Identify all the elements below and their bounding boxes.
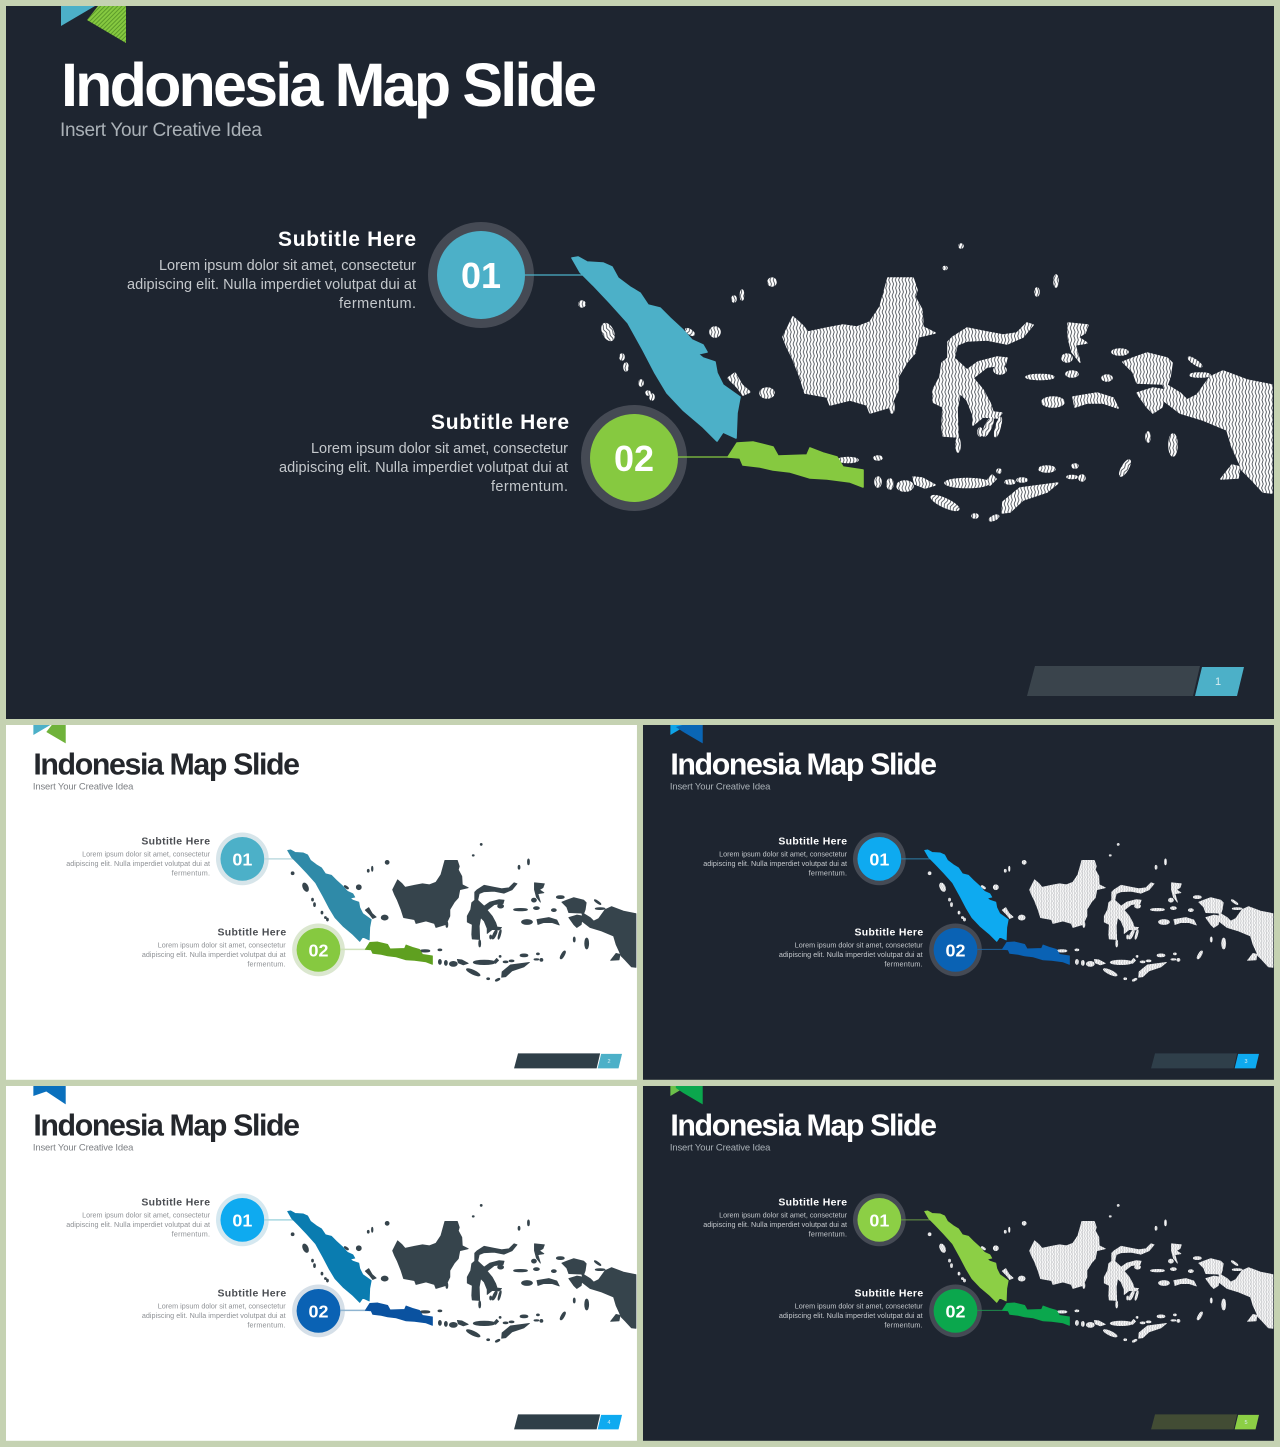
badge: 01 [853,1193,906,1246]
text block: item 02: fermentum. [247,959,286,968]
connector: 01 to Sumatra [264,857,296,860]
connector: 01 to Sumatra [901,1219,933,1221]
text block: item 01: adipiscing elit. Nulla imperdiet volutpat dui at [66,859,210,868]
badge: 02: 02 [614,438,654,479]
connector: 01 to Sumatra [901,858,933,860]
text block: item 01: Subtitle Here [141,1197,210,1208]
footer page tab: 2 [608,1059,611,1065]
map: Java highlight [1002,1303,1069,1325]
text block: item 02: Lorem ipsum dolor sit amet, consectetur [158,940,286,949]
subtitle: Insert Your Creative Idea [33,1143,134,1154]
text block: item 02: Lorem ipsum dolor sit amet, consectetur [311,441,568,457]
footer page tab: 4 [608,1420,611,1426]
map: Java highlight [1002,942,1069,964]
text block: item 01 [703,836,848,877]
map: Sumatra highlight [925,1211,1008,1302]
footer page tab: 1 [1215,676,1221,688]
subtitle: Insert Your Creative Idea [670,1143,771,1154]
text block: item 02 [142,1288,286,1329]
subtitle: Insert Your Creative Idea [670,782,771,793]
panel: small white slide, teal and green [6,725,637,1080]
text block: item 01 [66,1197,211,1238]
text block: item 01: fermentum. [172,868,210,877]
text block: item 01: adipiscing elit. Nulla imperdiet volutpat dui at [127,277,416,293]
map: Java highlight [365,942,432,964]
title: Indonesia Map Slide [33,749,300,782]
footer page tab [1151,1053,1259,1068]
subtitle: Insert Your Creative Idea [33,782,134,793]
text block: item 01: Subtitle Here [278,228,416,251]
title: Indonesia Map Slide [33,1110,300,1143]
text block: item 01: fermentum. [809,868,847,877]
icon: ribbon bookmark [670,725,703,743]
badge: 01: 01 [869,1210,889,1230]
footer page tab [1151,1414,1259,1429]
icon: ribbon bookmark [670,1086,703,1104]
text block: item 02 [279,411,569,495]
map: Sumatra highlight [925,850,1008,941]
badge: 01: 01 [461,255,501,296]
text block: item 02: Subtitle Here [854,927,923,938]
badge: 02 [929,1285,982,1337]
text block: item 01: Lorem ipsum dolor sit amet, consectetur [719,1210,848,1219]
badge: 02: 02 [309,940,328,960]
text block: item 02: adipiscing elit. Nulla imperdiet volutpat dui at [142,950,286,959]
text block: item 02: fermentum. [884,1320,923,1329]
text block: item 02 [779,1288,923,1329]
text block: item 01: Subtitle Here [141,836,210,847]
map: Java highlight [365,1303,432,1325]
text block: item 02: fermentum. [884,959,923,968]
panel: small dark slide, green [643,1086,1274,1441]
connector: 02 to Java [977,948,1007,950]
text block: item 01: Lorem ipsum dolor sit amet, consectetur [159,258,416,274]
icon: ribbon bookmark [33,1086,66,1104]
map: Sumatra highlight [288,1211,371,1302]
text block: item 02: Lorem ipsum dolor sit amet, consectetur [158,1301,286,1310]
badge: 02: 02 [946,940,965,960]
map: Indonesia striped islands [928,1204,1273,1343]
connector: 02 to Java [977,1309,1007,1311]
badge: 01: 01 [232,1210,252,1230]
connector: 02 to Java [340,1309,370,1312]
text block: item 01 [703,1197,848,1238]
text block: item 02: adipiscing elit. Nulla imperdiet volutpat dui at [779,950,923,959]
badge: 01 [216,1193,269,1246]
text block: item 01 [127,228,416,312]
text block: item 02: adipiscing elit. Nulla imperdiet volutpat dui at [142,1311,286,1320]
badge: 01 [853,832,906,885]
icon: ribbon bookmark [33,725,66,743]
text block: item 01: Lorem ipsum dolor sit amet, consectetur [82,849,211,858]
icon: ribbon bookmark [61,6,126,43]
badge: 02 [929,924,982,976]
text block: item 01: Subtitle Here [778,1197,847,1208]
map: Indonesia dark islands [291,843,636,982]
title: Indonesia Map Slide [670,1110,937,1143]
map: Indonesia dark islands [291,1204,636,1343]
text block: item 02 [142,927,286,968]
footer page tab: 5 [1245,1420,1248,1426]
text block: item 01: fermentum. [172,1229,210,1238]
connector: 02 to Java [340,948,370,951]
badge: 01 [216,832,269,885]
text block: item 01: fermentum. [809,1229,847,1238]
map: Sumatra highlight [288,850,371,941]
badge: 02: 02 [946,1301,965,1321]
panel: small dark slide, blue [643,725,1274,1080]
text block: item 01: adipiscing elit. Nulla imperdiet volutpat dui at [703,859,847,868]
text block: item 02: Lorem ipsum dolor sit amet, consectetur [795,1301,923,1310]
text block: item 01 [66,836,211,877]
title: Indonesia Map Slide [61,51,597,119]
text block: item 02: Subtitle Here [217,1288,286,1299]
text block: item 02: Subtitle Here [217,927,286,938]
connector: 01 to Sumatra [525,274,588,276]
text block: item 02: fermentum. [491,479,568,495]
text block: item 02: Subtitle Here [854,1288,923,1299]
footer page tab [514,1053,622,1068]
text block: item 01: Lorem ipsum dolor sit amet, consectetur [82,1210,211,1219]
map: Java highlight [728,442,863,487]
map: Sumatra highlight [572,257,740,441]
title: Indonesia Map Slide [670,749,937,782]
text block: item 02 [779,927,923,968]
subtitle: Insert Your Creative Idea [60,120,262,141]
text block: item 02: Lorem ipsum dolor sit amet, consectetur [795,940,923,949]
badge: 02 [292,1285,345,1337]
map: Indonesia striped islands [928,843,1273,982]
text block: item 01: Subtitle Here [778,836,847,847]
badge: 01 [428,222,534,328]
badge: 02: 02 [309,1301,328,1321]
text block: item 01: adipiscing elit. Nulla imperdiet volutpat dui at [66,1220,210,1229]
badge: 02 [292,924,345,976]
text block: item 01: Lorem ipsum dolor sit amet, consectetur [719,849,848,858]
badge: 01: 01 [869,849,889,869]
badge: 01: 01 [232,849,252,869]
text block: item 02: adipiscing elit. Nulla imperdiet volutpat dui at [279,460,568,476]
map: Indonesia striped islands [579,244,1272,522]
footer page tab: 3 [1245,1059,1248,1065]
footer page tab [514,1414,622,1429]
panel: small white slide, blue [6,1086,637,1441]
panel: large dark slide with teal and green highlights [6,6,1274,719]
badge: 02 [581,405,687,511]
text block: item 02: fermentum. [247,1320,286,1329]
text block: item 01: fermentum. [339,296,416,312]
connector: 02 to Java [678,456,738,458]
text block: item 02: adipiscing elit. Nulla imperdiet volutpat dui at [779,1311,923,1320]
text block: item 02: Subtitle Here [431,411,569,434]
text block: item 01: adipiscing elit. Nulla imperdiet volutpat dui at [703,1220,847,1229]
connector: 01 to Sumatra [264,1218,296,1221]
footer page tab [1027,666,1244,696]
